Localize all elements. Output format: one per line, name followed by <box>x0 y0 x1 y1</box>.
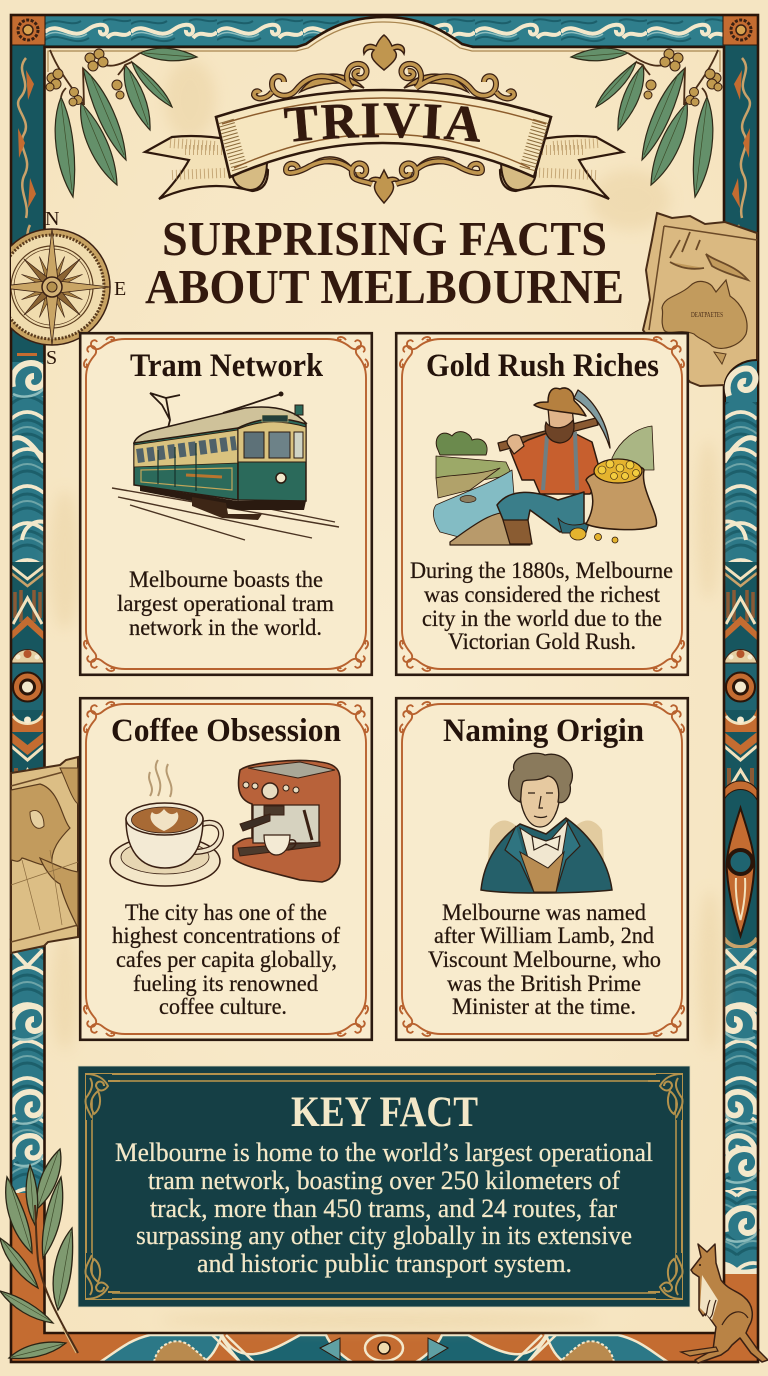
decoration: antique map of Australia top right <box>643 213 757 386</box>
key fact text: tram network, boasting over 250 kilometers of <box>148 1166 620 1195</box>
ribbon tail right <box>500 136 623 199</box>
key fact text: track, more than 450 trams, and 24 routes, far <box>150 1194 617 1223</box>
icon: eucalyptus branch top right <box>571 48 722 197</box>
ornament corners <box>85 1074 683 1299</box>
fact text: Viscount Melbourne, who <box>428 947 661 972</box>
decoration: antique map of Americas left <box>11 757 78 953</box>
heading: surprising facts about melbourne <box>145 211 624 314</box>
key fact text: Melbourne is home to the world’s largest operational <box>115 1138 653 1167</box>
title banner <box>142 34 626 204</box>
panel: key fact <box>78 1066 690 1307</box>
heading: key fact: KEY FACT <box>291 1089 478 1136</box>
icon: kangaroo bottom right <box>681 1244 768 1363</box>
ornament above banner <box>254 35 514 98</box>
illustration: latte cup and espresso machine <box>110 760 340 886</box>
left patterned band <box>11 46 46 1334</box>
heading: coffee obsession: Coffee Obsession <box>111 713 341 749</box>
illustration: gold miner <box>433 388 657 545</box>
compass letter E: E <box>114 278 126 300</box>
key fact text <box>115 1138 653 1278</box>
panel: tram network <box>80 333 372 675</box>
fact text: Victorian Gold Rush. <box>448 629 636 654</box>
fact text: was considered the richest <box>424 582 661 607</box>
compass letter S: S <box>46 347 57 369</box>
fact text: after William Lamb, 2nd <box>434 923 654 948</box>
heading: gold rush riches: Gold Rush Riches <box>426 348 659 384</box>
corner medallion: top left <box>11 15 45 45</box>
panel: naming origin <box>396 698 688 1040</box>
heading: surprising facts about melbourne: SURPRISING FACTS <box>162 211 607 266</box>
fact text <box>117 567 334 640</box>
title: TRIVIA: TRIVIA <box>284 103 480 142</box>
key fact text: surpassing any other city globally in its extensive <box>136 1221 632 1250</box>
fact text: city in the world due to the <box>422 606 662 631</box>
fact text: The city has one of the <box>125 900 327 925</box>
fact text <box>112 900 340 1019</box>
fact text: largest operational tram <box>117 591 334 616</box>
fact text: cafes per capita globally, <box>116 947 337 972</box>
panel: gold rush riches <box>396 333 688 675</box>
heading: surprising facts about melbourne: ABOUT MELBOURNE <box>145 259 624 314</box>
illustration: portrait of William Lamb <box>481 753 612 893</box>
fact text: fueling its renowned <box>133 971 318 996</box>
right patterned band <box>722 46 759 1334</box>
fact text <box>410 558 673 654</box>
icon: compass rose <box>0 229 110 345</box>
heading: naming origin: Naming Origin <box>443 713 644 749</box>
heading: tram network: Tram Network <box>130 348 324 384</box>
fact text: During the 1880s, Melbourne <box>410 558 673 583</box>
fact text <box>428 900 661 1019</box>
top wave band <box>45 16 723 45</box>
fact text: network in the world. <box>129 615 322 640</box>
fact text: highest concentrations of <box>112 923 340 948</box>
icon: gum leaf sprig bottom left <box>0 1149 78 1358</box>
fact text: coffee culture. <box>159 994 287 1019</box>
fact text: was the British Prime <box>447 971 641 996</box>
bottom patterned band <box>11 1333 758 1362</box>
corner medallion: top right <box>723 15 758 45</box>
wave swirl overlapping the map on the right band <box>725 360 757 402</box>
ribbon tail left <box>145 136 268 199</box>
fact text: Melbourne was named <box>442 900 646 925</box>
illustration: green tram <box>112 392 339 540</box>
fact text: Minister at the time. <box>452 994 636 1019</box>
fact text: Melbourne boasts the <box>129 567 323 592</box>
panel: coffee obsession <box>80 698 372 1040</box>
ribbon body <box>216 90 551 177</box>
decoration: antique map of Australia top right: DEATPAETES <box>691 311 723 319</box>
key fact text: and historic public transport system. <box>197 1249 572 1278</box>
compass letter N: N <box>45 208 59 230</box>
icon: eucalyptus branch top left <box>46 48 197 197</box>
ornament below banner <box>286 157 482 203</box>
